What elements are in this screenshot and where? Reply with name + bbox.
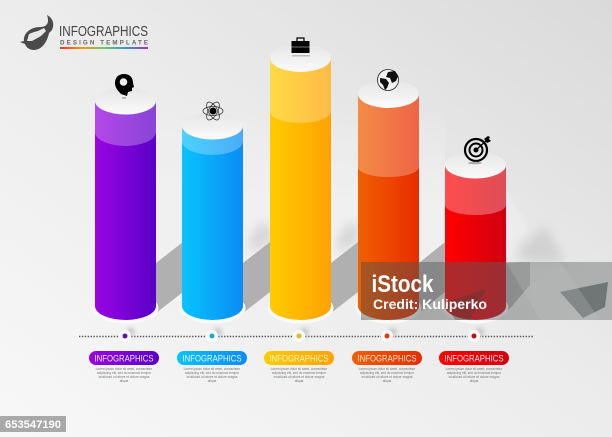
label: red: aliqua: [470, 379, 478, 383]
logo icon: [20, 15, 53, 50]
label: yellow: adipiscing elit, sed do eiusmod tempor: [272, 371, 327, 375]
icon: atom: [203, 100, 223, 122]
icon: target: [465, 136, 491, 164]
cylinder: purple: [95, 88, 156, 320]
label: yellow: aliqua: [295, 379, 303, 383]
logo subtitle: DESIGN TEMPLATE: [60, 40, 148, 46]
label: orange: adipiscing elit, sed do eiusmod tempor: [360, 371, 415, 375]
icon: head with bulb: [115, 74, 134, 99]
cylinder: orange: [358, 80, 419, 320]
timeline node: purple: [119, 327, 135, 342]
stock id badge: [0, 416, 66, 432]
icon: globe: [378, 70, 398, 90]
label: red: INFOGRAPHICS: [444, 354, 504, 364]
label: red: [439, 351, 509, 383]
label: purple: incididunt ut labore et dolore magna: [99, 375, 150, 379]
stock id badge: 653547190: [5, 419, 61, 431]
cylinder: blue: [182, 112, 243, 320]
logo title: INFOGRAPHICS: [59, 24, 148, 40]
cast shadows: [92, 110, 565, 324]
label: orange: INFOGRAPHICS: [358, 354, 416, 364]
label: yellow: [264, 351, 334, 383]
watermark logo: iStock: [372, 271, 434, 298]
label: blue: [177, 351, 247, 383]
timeline: [79, 327, 534, 342]
cylinder: yellow: [270, 44, 331, 320]
timeline node: blue: [206, 327, 222, 342]
label: red: adipiscing elit, sed do eiusmod tempor: [447, 371, 502, 375]
label: purple: Lorem ipsum dolor sit amet, consectetur: [96, 367, 153, 371]
label: purple: [89, 351, 159, 383]
label: purple: INFOGRAPHICS: [94, 354, 154, 364]
label: orange: aliqua: [383, 379, 391, 383]
label: purple: adipiscing elit, sed do eiusmod tempor: [97, 371, 152, 375]
label: yellow: incididunt ut labore et dolore magna: [274, 375, 325, 379]
label: blue: incididunt ut labore et dolore magna: [187, 375, 238, 379]
label: orange: Lorem ipsum dolor sit amet, consectetur: [359, 367, 416, 371]
label: yellow: INFOGRAPHICS: [270, 354, 328, 364]
rainbow underline: [60, 47, 148, 49]
label: red: incididunt ut labore et dolore magna: [449, 375, 500, 379]
label: blue: adipiscing elit, sed do eiusmod tempor: [185, 371, 240, 375]
timeline node: orange: [381, 327, 397, 342]
label: blue: Lorem ipsum dolor sit amet, consectetur: [184, 367, 241, 371]
logo: [20, 15, 148, 50]
timeline node: yellow: [293, 327, 309, 342]
label: red: Lorem ipsum dolor sit amet, consectetur: [446, 367, 503, 371]
watermark band: [361, 262, 612, 320]
label: blue: aliqua: [208, 379, 216, 383]
label: orange: incididunt ut labore et dolore magna: [362, 375, 413, 379]
watermark credit: Credit: Kuliperko: [373, 297, 487, 312]
label: yellow: Lorem ipsum dolor sit amet, consectetur: [271, 367, 328, 371]
label: orange: [352, 351, 422, 383]
cylinder: red: [445, 152, 506, 320]
label: purple: aliqua: [120, 379, 128, 383]
timeline node: red: [468, 327, 484, 342]
label: blue: INFOGRAPHICS: [182, 354, 242, 364]
icon: briefcase: [292, 38, 310, 56]
